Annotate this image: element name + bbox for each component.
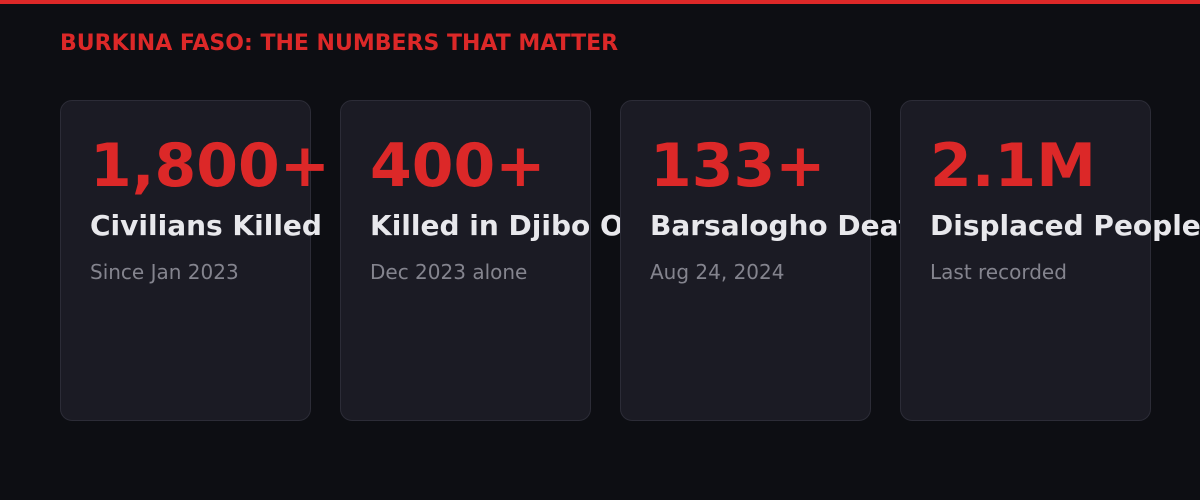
title: BURKINA FASO: THE NUMBERS THAT MATTER [60, 31, 618, 56]
stat number: 2.1M [930, 131, 1096, 201]
panel: displaced [900, 100, 1151, 421]
stat label: Barsalogho Deaths [650, 209, 949, 242]
panel: djibo [340, 100, 591, 421]
stat note: Last recorded [930, 260, 1067, 284]
stat label: Displaced People [930, 209, 1200, 242]
panel: civilians killed [60, 100, 311, 421]
stat note: Dec 2023 alone [370, 260, 527, 284]
panel: barsalogho [620, 100, 871, 421]
stat note: Aug 24, 2024 [650, 260, 784, 284]
stat number: 1,800+ [90, 131, 330, 201]
stat label: Civilians Killed [90, 209, 322, 242]
stat number: 400+ [370, 131, 546, 201]
stat number: 133+ [650, 131, 826, 201]
stat label: Killed in Djibo Operation [370, 209, 758, 242]
stat note: Since Jan 2023 [90, 260, 239, 284]
